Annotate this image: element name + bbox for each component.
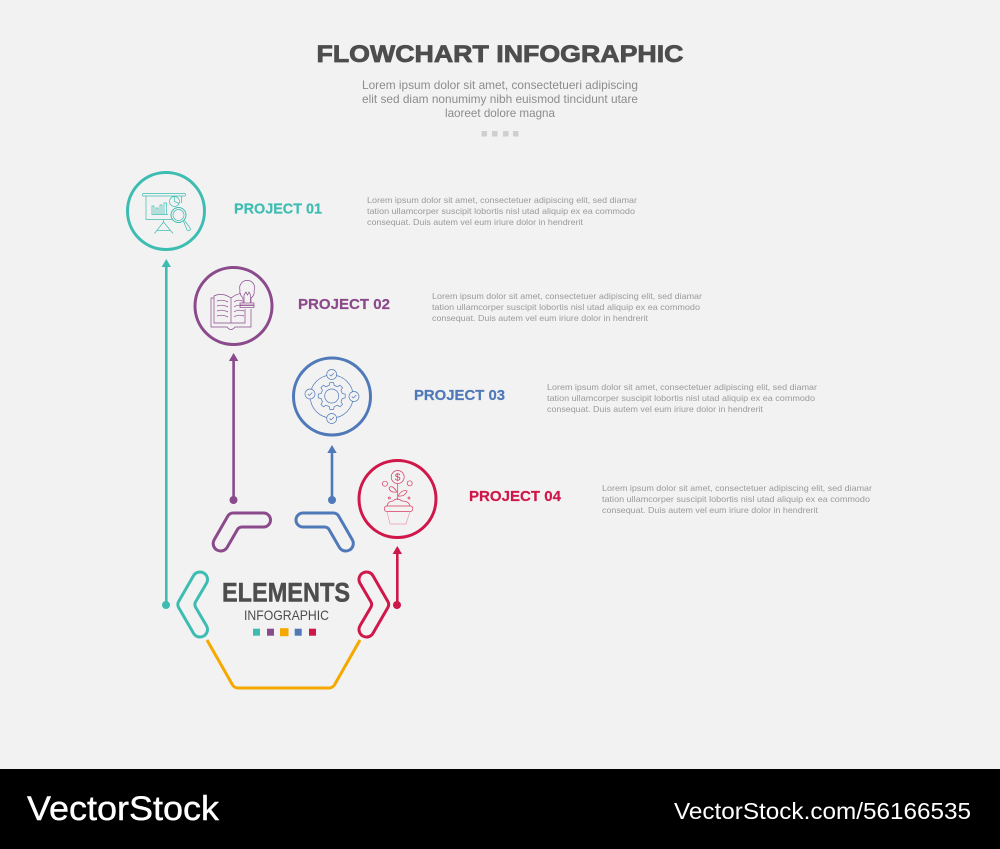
project 04 circle — [359, 460, 436, 538]
project 01 description — [367, 195, 637, 227]
project 03 circle — [294, 358, 370, 435]
hexagon segment: purple — [213, 513, 271, 551]
icon: presentation board with magnifier — [142, 194, 190, 234]
project 04 description: consequat. Duis autem vel eum iriure dolor in hendrerit — [602, 505, 819, 515]
project 04 description: Lorem ipsum dolor sit amet, consectetuer adipiscing elit, sed diamar — [602, 483, 872, 493]
arrow: purple up to project 02 — [229, 353, 238, 504]
icon: gear with check marks — [305, 370, 359, 424]
project 02 description: tation ullamcorper suscipit lobortis nisl utad aliquip ex ea commodo — [432, 302, 700, 312]
project 04 label: PROJECT 04 — [469, 488, 562, 505]
hexagon segment: yellow — [207, 640, 360, 688]
project 03 description: consequat. Duis autem vel eum iriure dolor in hendrerit — [547, 404, 764, 414]
center heading: ELEMENTS — [222, 578, 350, 608]
project 03 description: Lorem ipsum dolor sit amet, consectetuer adipiscing elit, sed diamar — [547, 382, 817, 392]
project 01 description: Lorem ipsum dolor sit amet, consectetuer adipiscing elit, sed diamar — [367, 195, 637, 205]
title dots — [482, 131, 518, 136]
icon: money plant in pot: $ — [395, 472, 401, 484]
project 02 description: Lorem ipsum dolor sit amet, consectetuer adipiscing elit, sed diamar — [432, 291, 702, 301]
project 01 circle — [128, 172, 204, 250]
project 01 label: PROJECT 01 — [234, 200, 322, 218]
icon: open book with lightbulb — [211, 280, 255, 330]
project 02 label: PROJECT 02 — [298, 296, 390, 313]
project 03 description — [547, 382, 817, 414]
footer bar — [0, 769, 1000, 849]
project 03 description: tation ullamcorper suscipit lobortis nisl utad aliquip ex ea commodo — [547, 393, 815, 403]
color legend squares — [253, 628, 316, 636]
hexagon segment: red — [359, 572, 389, 637]
subtitle text: laoreet dolore magna — [445, 106, 555, 120]
project 01 description: tation ullamcorper suscipit lobortis nisl utad aliquip ex ea commodo — [367, 206, 635, 216]
project 02 description: consequat. Duis autem vel eum iriure dolor in hendrerit — [432, 313, 649, 323]
arrow: red up to project 04 — [393, 546, 402, 609]
arrow: teal up to project 01 — [162, 259, 171, 609]
title: FLOWCHART INFOGRAPHIC — [316, 41, 684, 68]
project 02 circle — [195, 268, 272, 344]
subtitle text — [362, 78, 638, 120]
footer url: VectorStock.com/56166535 — [674, 798, 971, 824]
footer logo: VectorStock — [27, 790, 220, 828]
project 04 description: tation ullamcorper suscipit lobortis nisl utad aliquip ex ea commodo — [602, 494, 870, 504]
project 04 description — [602, 483, 872, 515]
hexagon segment: blue — [296, 513, 353, 551]
project 01 description: consequat. Duis autem vel eum iriure dolor in hendrerit — [367, 217, 584, 227]
project 02 description — [432, 291, 702, 323]
hexagon segment: teal — [178, 572, 208, 637]
arrow: blue up to project 03 — [327, 445, 337, 504]
project 03 label: PROJECT 03 — [414, 387, 505, 404]
center subheading: INFOGRAPHIC — [244, 607, 329, 623]
subtitle text: elit sed diam nonumimy nibh euismod tincidunt utare — [362, 92, 638, 106]
subtitle text: Lorem ipsum dolor sit amet, consectetueri adipiscing — [362, 78, 638, 92]
icon: money plant in pot — [382, 470, 413, 524]
